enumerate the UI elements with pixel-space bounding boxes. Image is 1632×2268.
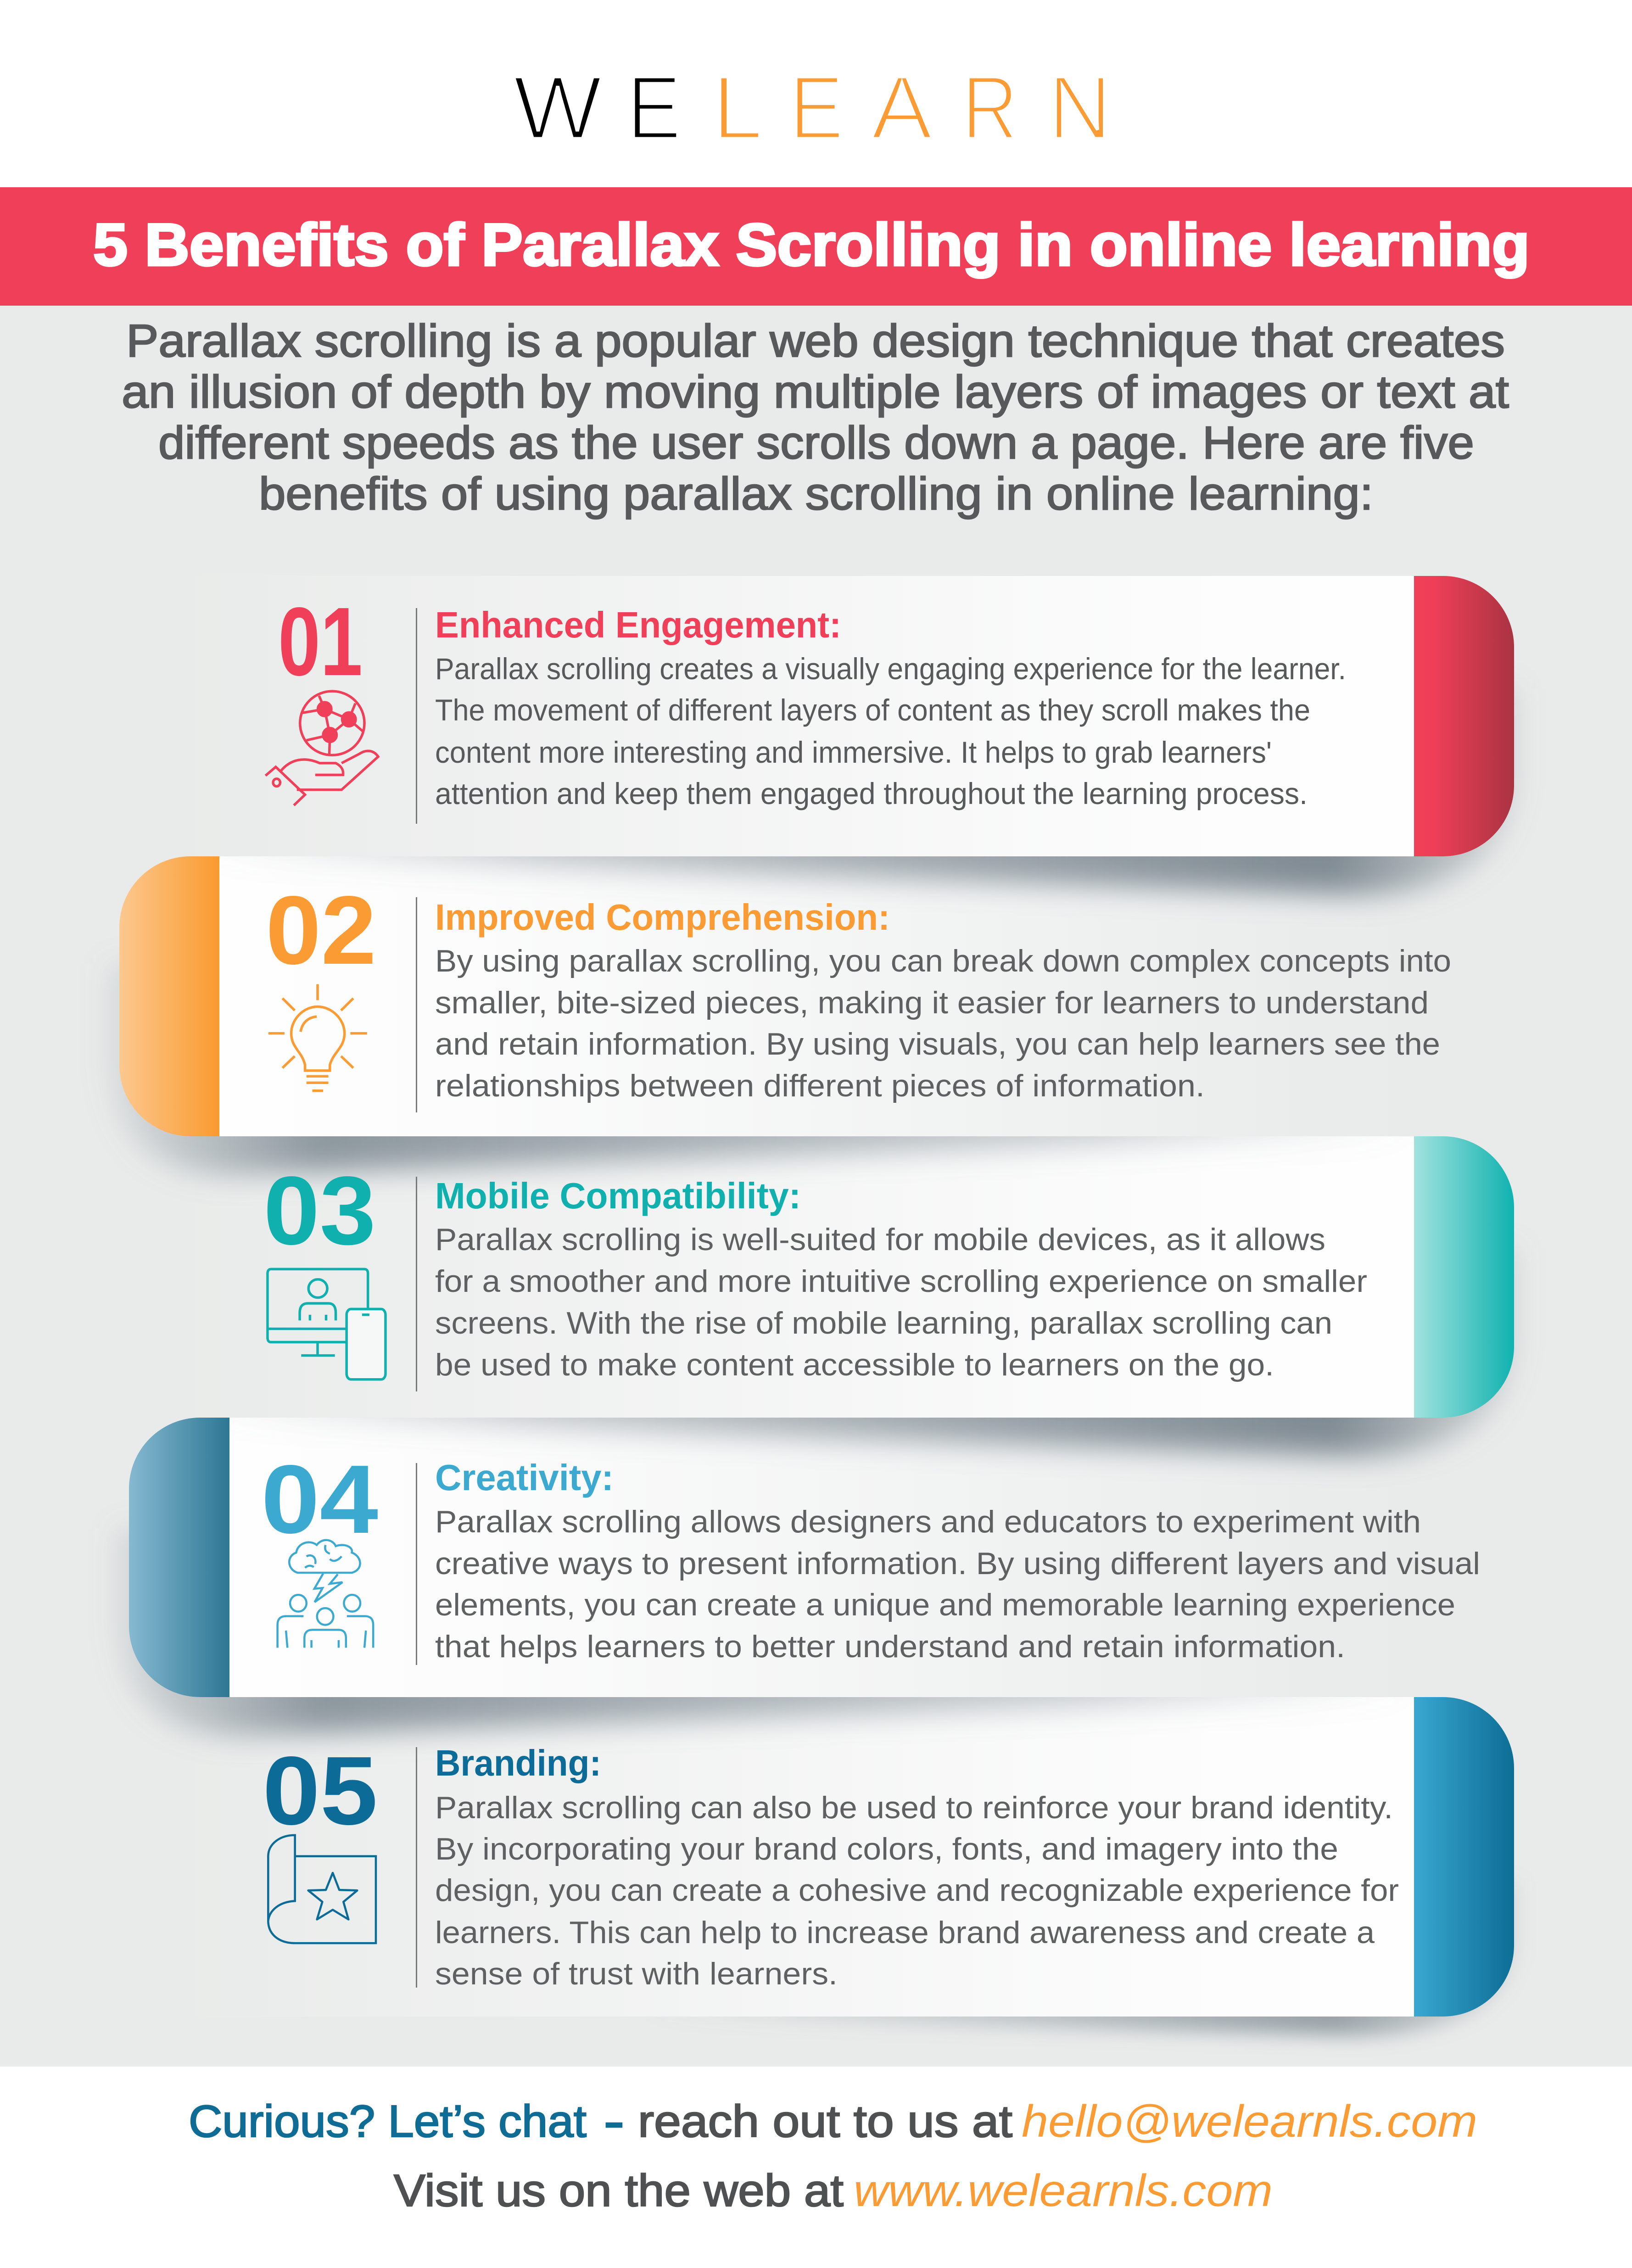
- footer: contact: [0, 2067, 1632, 2268]
- contact line: -: [603, 2096, 625, 2146]
- heading: Mobile Compatibility:: [435, 1175, 801, 1216]
- body text: [435, 944, 1451, 1103]
- intro paragraph: different speeds as the user scrolls down a page. Here are five: [158, 417, 1474, 469]
- body text: Parallax scrolling can also be used to reinforce your brand identity.: [435, 1790, 1393, 1825]
- logo: WELEARN: W: [513, 57, 602, 158]
- body text: attention and keep them engaged throughout the learning process.: [435, 776, 1308, 810]
- body text: Parallax scrolling is well-suited for mobile devices, as it allows: [435, 1222, 1325, 1257]
- body text: smaller, bite-sized pieces, making it easier for learners to understand: [435, 985, 1429, 1020]
- icon: light bulb: [268, 984, 367, 1091]
- body text: elements, you can create a unique and memorable learning experience: [435, 1587, 1455, 1622]
- body text: [435, 1790, 1399, 1991]
- panel: 01 Enhanced Engagement: [181, 576, 1514, 856]
- tab: red: [1414, 576, 1514, 856]
- icon: brainstorm cloud with people: [278, 1540, 373, 1648]
- panel: 05 Branding: [181, 1697, 1514, 2017]
- title banner: 5 Benefits of Parallax Scrolling in online learning: [93, 211, 1530, 278]
- divider: [416, 1177, 417, 1391]
- number 01: 01: [278, 587, 363, 696]
- body text: learners. This can help to increase brand awareness and create a: [435, 1915, 1375, 1950]
- body text: sense of trust with learners.: [435, 1956, 838, 1991]
- contact line: reach out to us at: [638, 2096, 1012, 2146]
- divider: [416, 1747, 417, 1988]
- panel: 03 Mobile Compatibility: [181, 1136, 1514, 1418]
- contact line: hello@welearnls.com: [1022, 2096, 1477, 2146]
- logo: WELEARN: A: [871, 57, 933, 158]
- logo: WELEARN: R: [962, 57, 1018, 158]
- body text: for a smoother and more intuitive scrolling experience on smaller: [435, 1264, 1367, 1299]
- intro paragraph: an illusion of depth by moving multiple layers of images or text at: [122, 366, 1509, 418]
- panel: 04 Creativity: [129, 1418, 1480, 1697]
- body text: [435, 652, 1346, 810]
- heading: Enhanced Engagement:: [435, 604, 841, 645]
- intro paragraph: benefits of using parallax scrolling in online learning:: [259, 468, 1373, 520]
- body text: By using parallax scrolling, you can break down complex concepts into: [435, 944, 1451, 978]
- page background: [0, 306, 1632, 2067]
- logo: WELEARN: [513, 57, 1112, 158]
- heading: Branding:: [435, 1743, 601, 1783]
- contact line: Curious? Let’s chat: [189, 2096, 587, 2146]
- body text: that helps learners to better understand and retain information.: [435, 1629, 1345, 1664]
- number 04: 04: [261, 1445, 378, 1553]
- tab: dark blue: [1414, 1697, 1514, 2017]
- logo: WELEARN: E: [789, 57, 844, 158]
- icon: hand holding network globe: [265, 691, 378, 805]
- body text: [435, 1504, 1480, 1664]
- number 02: 02: [266, 876, 376, 984]
- body text: design, you can create a cohesive and recognizable experience for: [435, 1873, 1399, 1908]
- body text: [435, 1222, 1367, 1382]
- website line: Visit us on the web at: [394, 2165, 844, 2216]
- body text: relationships between different pieces of information.: [435, 1068, 1205, 1103]
- body text: creative ways to present information. By using different layers and visual: [435, 1546, 1480, 1581]
- website line: www.welearnls.com: [854, 2165, 1273, 2216]
- title banner: [0, 187, 1632, 306]
- divider: [416, 608, 417, 824]
- tab: steel blue: [129, 1418, 229, 1697]
- tab: orange: [119, 856, 219, 1136]
- body text: Parallax scrolling allows designers and educators to experiment with: [435, 1504, 1421, 1539]
- panel: 02 Improved Comprehension: [119, 856, 1451, 1136]
- icon: banner scroll with star: [268, 1835, 376, 1943]
- heading: Creativity:: [435, 1457, 614, 1498]
- body text: content more interesting and immersive. It helps to grab learners': [435, 735, 1272, 769]
- body text: screens. With the rise of mobile learning, parallax scrolling can: [435, 1306, 1332, 1341]
- body text: Parallax scrolling creates a visually engaging experience for the learner.: [435, 652, 1346, 686]
- number 03: 03: [263, 1156, 376, 1265]
- heading: Improved Comprehension:: [435, 897, 890, 938]
- body text: and retain information. By using visuals, you can help learners see the: [435, 1027, 1440, 1061]
- website line: [394, 2165, 1273, 2216]
- divider: [416, 1463, 417, 1665]
- intro paragraph: [122, 315, 1509, 520]
- contact line: [189, 2096, 1477, 2146]
- body text: be used to make content accessible to learners on the go.: [435, 1347, 1274, 1382]
- intro paragraph: Parallax scrolling is a popular web design technique that creates: [126, 315, 1505, 367]
- number 05: 05: [263, 1736, 378, 1845]
- icon: monitor and phone: [268, 1269, 386, 1380]
- logo: WELEARN: L: [712, 57, 763, 158]
- divider: [416, 897, 417, 1112]
- logo: WELEARN: N: [1048, 57, 1112, 158]
- tab: teal: [1414, 1136, 1514, 1418]
- body text: By incorporating your brand colors, fonts, and imagery into the: [435, 1832, 1338, 1866]
- logo: WELEARN: E: [627, 57, 681, 158]
- body text: The movement of different layers of content as they scroll makes the: [435, 693, 1310, 727]
